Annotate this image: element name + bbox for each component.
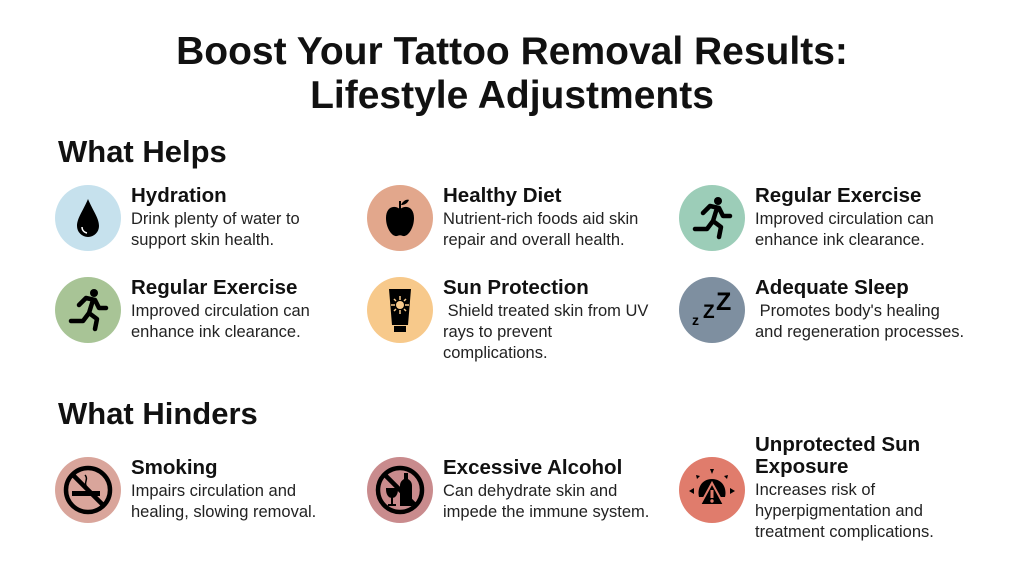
icon: zzz: Z — [716, 288, 731, 316]
item: hydration — [55, 184, 300, 251]
icon: water drop — [55, 185, 121, 251]
text: adequate sleep: Adequate Sleep — [755, 276, 909, 299]
text: regular exercise: enhance ink clearance. — [755, 231, 925, 249]
icon: apple — [367, 185, 433, 251]
item: adequate sleep — [679, 276, 964, 343]
icon: runner — [679, 185, 745, 251]
title: Lifestyle Adjustments — [310, 74, 714, 117]
text: healthy diet: Healthy Diet — [443, 184, 561, 207]
text: unprotected sun exposure: Increases risk of — [755, 481, 875, 499]
item: healthy diet — [367, 184, 638, 251]
text: hydration: Drink plenty of water to — [131, 210, 300, 228]
text: excessive alcohol: Can dehydrate skin and — [443, 482, 617, 500]
text: sun protection: Sun Protection — [443, 276, 589, 299]
text: unprotected sun exposure: Exposure — [755, 455, 848, 478]
icon: no alcohol — [367, 457, 433, 523]
item: regular exercise — [55, 276, 310, 343]
item: smoking — [55, 456, 316, 523]
text: smoking: Impairs circulation and — [131, 482, 296, 500]
text: sun protection: Shield treated skin from UV — [448, 302, 648, 320]
text: regular exercise: enhance ink clearance. — [131, 323, 301, 341]
icon: no smoking — [55, 457, 121, 523]
text: excessive alcohol — [443, 456, 649, 521]
text: sun protection: complications. — [443, 344, 548, 362]
text: excessive alcohol: impede the immune system. — [443, 503, 649, 521]
text: smoking: Smoking — [131, 456, 218, 479]
text: regular exercise: Regular Exercise — [755, 184, 921, 207]
text: hydration: support skin health. — [131, 231, 274, 249]
item: regular exercise (top) — [679, 184, 934, 251]
text: regular exercise — [755, 184, 934, 249]
icon: runner — [55, 277, 121, 343]
text: regular exercise — [131, 276, 310, 341]
title — [176, 30, 848, 117]
icon: sunscreen — [367, 277, 433, 343]
text: regular exercise: Improved circulation can — [131, 302, 310, 320]
text: adequate sleep: Promotes body's healing — [760, 302, 940, 320]
text: smoking: healing, slowing removal. — [131, 503, 316, 521]
text: unprotected sun exposure: Unprotected Sun — [755, 433, 920, 456]
text: smoking — [131, 456, 316, 521]
icon: zzz: z — [692, 312, 699, 328]
title: Boost Your Tattoo Removal Results: — [176, 30, 848, 73]
text: sun protection: rays to prevent — [443, 323, 552, 341]
heading: what hinders: What Hinders — [58, 396, 258, 431]
icon: zzz: Z — [703, 302, 715, 323]
text: adequate sleep — [755, 276, 964, 341]
item: excessive alcohol — [367, 456, 649, 523]
text: adequate sleep: and regeneration processes. — [755, 323, 964, 341]
text: unprotected sun exposure — [755, 433, 934, 541]
item: unprotected sun exposure — [679, 433, 934, 541]
text: sun protection — [443, 276, 648, 362]
text: excessive alcohol: Excessive Alcohol — [443, 456, 622, 479]
text: hydration — [131, 184, 300, 249]
text: unprotected sun exposure: hyperpigmentation and — [755, 502, 923, 520]
heading: what helps: What Helps — [58, 134, 227, 169]
icon: zzz — [679, 277, 745, 343]
text: regular exercise: Regular Exercise — [131, 276, 297, 299]
text: healthy diet: Nutrient-rich foods aid skin — [443, 210, 638, 228]
text: hydration: Hydration — [131, 184, 227, 207]
text: healthy diet — [443, 184, 638, 249]
text: healthy diet: repair and overall health. — [443, 231, 625, 249]
text: regular exercise: Improved circulation can — [755, 210, 934, 228]
icon: sun warning — [679, 457, 745, 523]
item: sun protection — [367, 276, 648, 362]
text: unprotected sun exposure: treatment complications. — [755, 523, 934, 541]
